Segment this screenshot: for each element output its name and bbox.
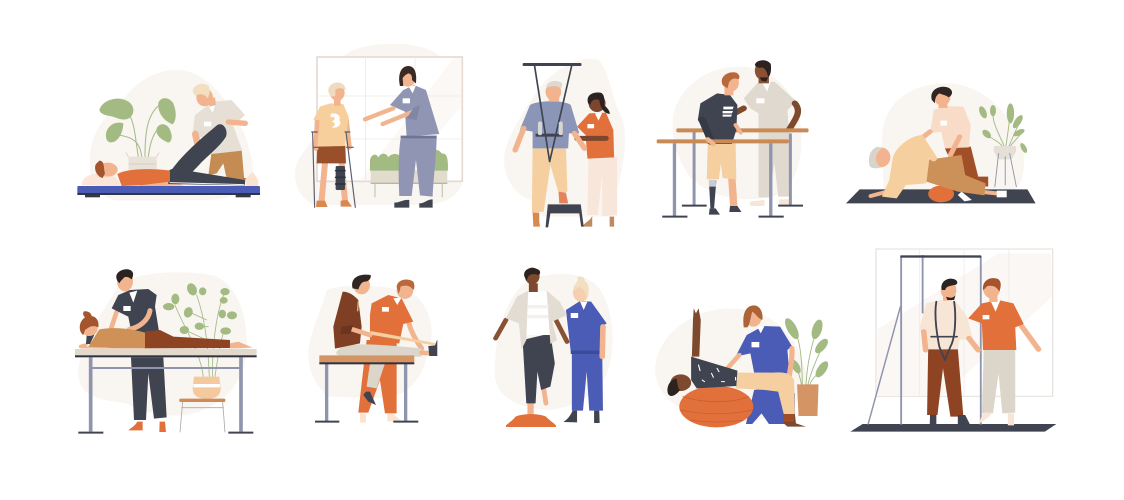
plant with pot on stool xyxy=(163,282,237,432)
background blob xyxy=(295,44,463,205)
balance dome xyxy=(506,414,556,427)
plant on stand xyxy=(977,103,1029,187)
therapist xyxy=(111,269,167,432)
background blob xyxy=(78,272,247,416)
scene 9: exercise ball xyxy=(655,305,831,427)
scene 4: parallel bars with prosthetic leg xyxy=(657,60,809,217)
patient xyxy=(79,311,253,348)
patient on the ball xyxy=(667,308,806,427)
background blob xyxy=(673,67,801,199)
patient xyxy=(869,135,1007,201)
exercise ball xyxy=(679,386,753,427)
window xyxy=(876,249,1053,396)
therapist xyxy=(358,280,422,423)
window xyxy=(317,57,462,181)
planter with bushes xyxy=(370,150,448,197)
blue mat xyxy=(77,186,260,197)
harness frame xyxy=(868,255,981,425)
patient on the mat xyxy=(82,124,258,187)
therapist xyxy=(727,305,795,424)
nurse xyxy=(577,92,617,227)
patient in harness xyxy=(515,65,584,227)
scene 3: gait harness with step stool xyxy=(504,59,625,227)
patient with crutches xyxy=(312,83,355,207)
patient on dome xyxy=(496,268,567,417)
background blob xyxy=(495,274,613,410)
patient xyxy=(698,72,742,215)
scene 1: leg stretch on a blue mat xyxy=(77,70,260,201)
nurse xyxy=(365,66,439,208)
scene 10: harness frame by a window xyxy=(850,249,1056,432)
background blob xyxy=(504,59,625,217)
background blob xyxy=(655,308,806,422)
background blob xyxy=(90,70,252,201)
back rail and posts xyxy=(676,128,809,206)
strap xyxy=(370,331,435,345)
exercise mat xyxy=(846,189,1036,203)
scene 5: assisted floor stretch xyxy=(846,83,1036,203)
therapist xyxy=(924,87,988,187)
background blob xyxy=(882,83,1024,190)
step stool xyxy=(546,204,584,227)
scene 8: balance dome xyxy=(495,268,613,427)
patient in harness xyxy=(919,279,978,427)
scene 6: massage table xyxy=(75,269,257,433)
overhead bar xyxy=(523,63,581,66)
floor mat xyxy=(850,424,1056,432)
therapist xyxy=(736,60,798,206)
front rail and posts xyxy=(657,139,789,217)
massage table xyxy=(75,349,257,433)
scene 7: seated strap stretch xyxy=(308,275,437,423)
background blob xyxy=(308,286,432,398)
potted plant xyxy=(99,98,176,171)
therapist xyxy=(968,278,1039,425)
patient xyxy=(333,275,437,405)
scene 2: crutch walking by a window xyxy=(295,44,463,208)
table xyxy=(315,355,418,422)
foam roller xyxy=(928,186,954,202)
nurse in blue scrubs xyxy=(563,276,607,423)
therapist xyxy=(193,84,252,183)
potted plant xyxy=(782,317,831,416)
